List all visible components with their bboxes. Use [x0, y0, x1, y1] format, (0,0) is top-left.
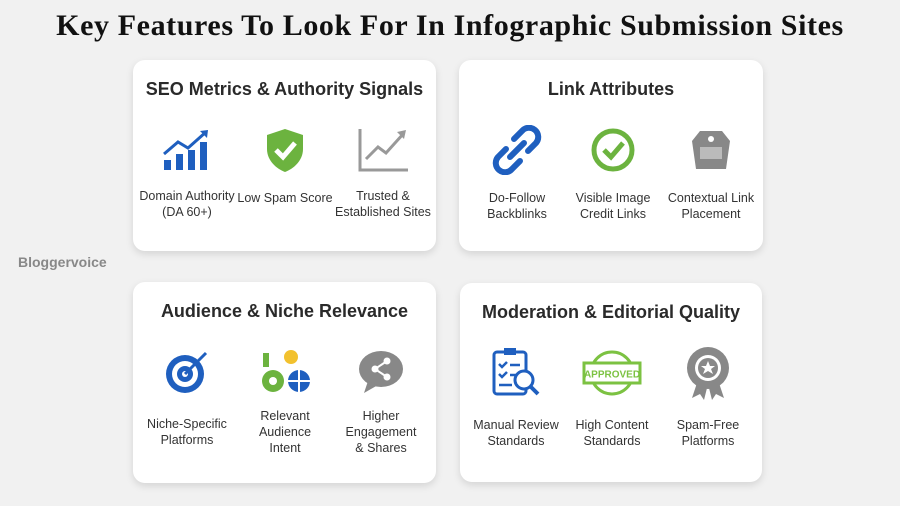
- item: audience intent: [259, 350, 311, 455]
- item: domain authority: [139, 130, 235, 219]
- item: low spam: [237, 129, 333, 205]
- item: trusted sites: [335, 129, 431, 219]
- title: Key Features To Look For In Infographic Submission Sites: [56, 9, 844, 42]
- panel: moderation: [460, 283, 762, 482]
- panel: audience: Engagement: [346, 425, 416, 439]
- panel: link attributes: Do-Follow: [489, 191, 545, 205]
- panel: SEO metrics: Domain Authority: [139, 189, 235, 203]
- panel: moderation: Manual Review: [473, 418, 559, 432]
- panel: moderation: Standards: [584, 434, 640, 448]
- heading: Link Attributes: [548, 79, 674, 99]
- panel: audience: Platforms: [161, 433, 213, 447]
- heading: Moderation & Editorial Quality: [482, 302, 740, 322]
- panel: link attributes: Backblinks: [487, 207, 547, 221]
- panel: audience: Relevant: [260, 409, 310, 423]
- item: dofollow: [487, 125, 547, 221]
- panel: link attributes: Credit Links: [580, 207, 646, 221]
- panel: SEO metrics: Trusted &: [356, 189, 410, 203]
- watermark: Bloggervoice: [18, 254, 107, 270]
- panel: SEO metrics: (DA 60+): [162, 205, 212, 219]
- heading: Audience & Niche Relevance: [161, 301, 408, 321]
- panel: moderation: Spam-Free: [677, 418, 739, 432]
- panel: link attributes: Contextual Link: [668, 191, 754, 205]
- item: manual review: [473, 348, 559, 448]
- item: spam-free: [677, 347, 739, 448]
- panel: audience: Intent: [269, 441, 301, 455]
- item: contextual: [668, 131, 754, 221]
- heading: SEO Metrics & Authority Signals: [146, 79, 423, 99]
- panel: moderation: High Content: [576, 418, 648, 432]
- panel: audience: Audience: [259, 425, 311, 439]
- item: engagement: [346, 351, 416, 455]
- panel: audience: Higher: [363, 409, 399, 423]
- item: image credit: [576, 128, 650, 221]
- panel: SEO metrics: Established Sites: [335, 205, 431, 219]
- panel: moderation: Platforms: [682, 434, 734, 448]
- panel: audience: Niche-Specific: [147, 417, 227, 431]
- panel: audience: & Shares: [355, 441, 407, 455]
- panel: link attributes: Placement: [681, 207, 741, 221]
- panel: SEO metrics: [133, 60, 436, 251]
- panel: link attributes: Visible Image: [576, 191, 650, 205]
- panel: link attributes: [459, 60, 763, 251]
- panel: SEO metrics: Low Spam Score: [237, 191, 333, 205]
- panel: audience: [133, 282, 436, 483]
- item: approved: APPROVED: [584, 370, 640, 380]
- panel: moderation: Standards: [488, 434, 544, 448]
- item: niche: [147, 352, 227, 447]
- item: approved: [576, 350, 648, 448]
